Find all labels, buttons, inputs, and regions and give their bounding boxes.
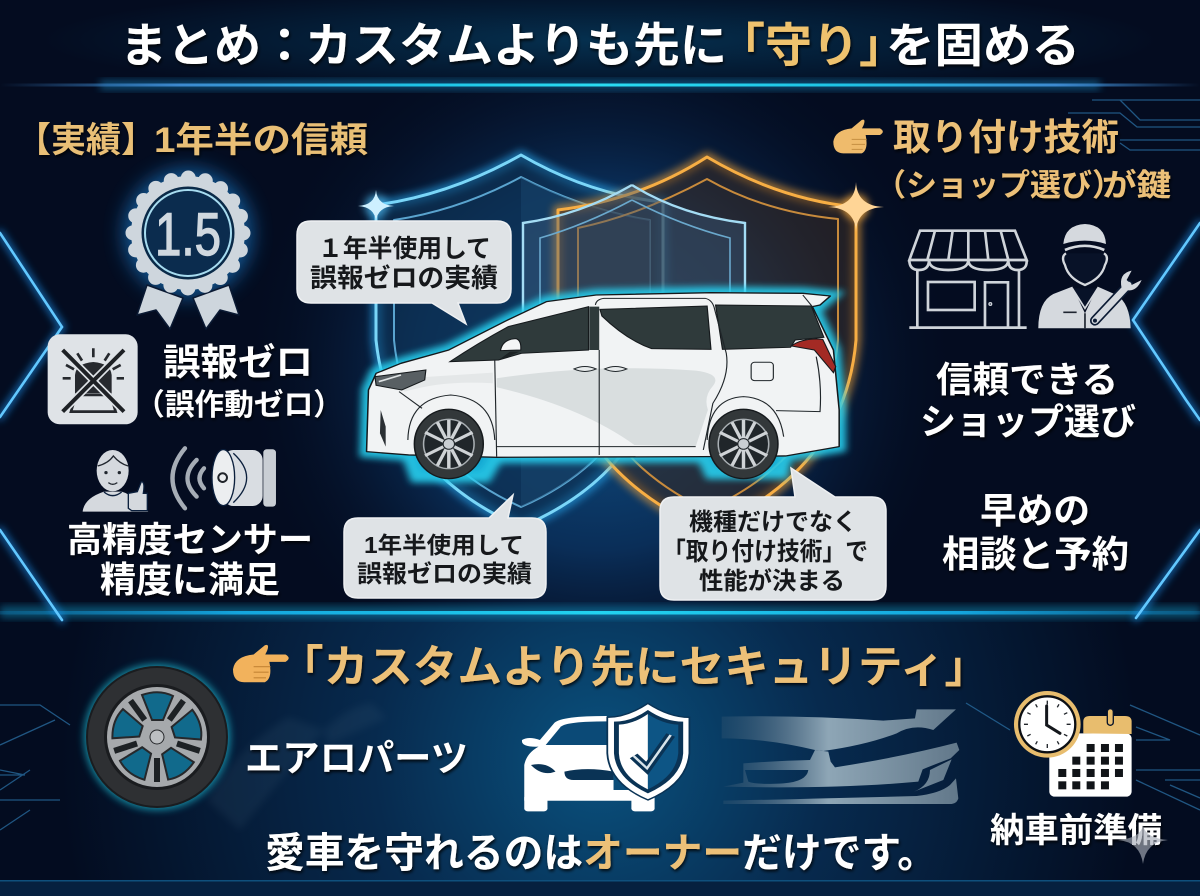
- text: early consultation and booking: 相談と予約: [942, 534, 1129, 575]
- icon: alarm crossed out: [48, 334, 138, 424]
- text: high precision sensor: 高精度センサー: [67, 521, 313, 560]
- text: choose a trusted shop: [920, 359, 1136, 442]
- icon: middle shield: [523, 185, 745, 420]
- title: カスタムよりも先に: [305, 19, 727, 72]
- icon: light flares on shields: [358, 182, 884, 232]
- icon: tire and wheel: [84, 664, 230, 810]
- text: aero parts: エアロパーツ: [245, 738, 468, 779]
- heading: installation skill: 取り付け技術: [893, 117, 1119, 158]
- icon: pointing hand: [233, 645, 289, 682]
- icon: 1.5 rosette badge: [124, 169, 252, 329]
- wheel: front: [414, 409, 483, 479]
- title: 守り: [765, 19, 859, 72]
- text: only the owner can protect the car: 愛車を守れるのはオーナーだけです。: [265, 830, 937, 876]
- chevron neon lines: [0, 223, 1200, 620]
- text: satisfied with precision: 精度に満足: [100, 559, 280, 600]
- icon: satisfied user: [83, 450, 148, 512]
- heading: track record: 1年半の信頼: [154, 121, 368, 160]
- wheel: rear: [709, 409, 778, 479]
- icon: mechanic with wrench: [1038, 224, 1142, 328]
- text: zero false alarms: 誤報ゼロ: [163, 342, 313, 383]
- icon: clock and calendar: [1014, 691, 1132, 797]
- decorative swoosh: [207, 703, 386, 830]
- callout: bottom right: 性能が決まる: [699, 567, 845, 595]
- icon: high precision sensor: [172, 448, 276, 508]
- heading: shop selection is key: が鍵: [1102, 168, 1171, 203]
- panel: center shields and car: [297, 155, 886, 600]
- heading: track record: 【実績】: [16, 121, 156, 160]
- icon: orange shield: [558, 157, 856, 530]
- callout: bottom left: 誤報ゼロの実績: [357, 560, 532, 588]
- panel: installation skill (right column): [833, 117, 1171, 575]
- icon: 1.5 rosette badge: 1.5: [155, 201, 221, 268]
- text: choose a trusted shop: ショップ選び: [920, 401, 1136, 442]
- text: pre-delivery preparation: 納車前準備: [990, 812, 1162, 850]
- callout: bottom left: 1年半使用して: [364, 532, 524, 558]
- text: early consultation and booking: 早めの: [980, 490, 1090, 531]
- title: を固める: [886, 19, 1080, 72]
- heading: security before custom: 「カスタムより先にセキュリティ」: [279, 643, 989, 692]
- text: choose a trusted shop: 信頼できる: [936, 359, 1118, 400]
- icon: blue shield: [376, 155, 663, 527]
- callout: bottom right: 「取り付け技術」で: [663, 538, 868, 566]
- illustration: aero body kit silhouette: [722, 709, 959, 804]
- callout: top left: 誤報ゼロの実績: [310, 263, 498, 293]
- callout: top left: １年半使用して: [318, 235, 491, 263]
- panel: track record (left column): [16, 121, 368, 600]
- callout: bottom left: [344, 495, 546, 598]
- text: zero malfunctions: （誤作動ゼロ）: [135, 389, 343, 422]
- title: 」: [859, 19, 906, 72]
- callout: top left: [297, 221, 511, 324]
- text: early consultation and booking: [942, 490, 1129, 575]
- title: [120, 19, 1080, 72]
- icon: car with shield check: [522, 703, 689, 811]
- heading: shop selection is key: （ショップ選び）: [875, 168, 1123, 203]
- illustration: white minivan: [367, 293, 839, 479]
- title: まとめ：: [120, 19, 308, 72]
- decorative sparkle: [1118, 825, 1168, 864]
- heading: track record: [16, 121, 368, 160]
- icon: shop: [909, 231, 1027, 328]
- panel: bottom band: [84, 643, 1168, 876]
- callout: bottom right: [660, 468, 886, 600]
- icon: pointing hand: [833, 120, 883, 153]
- callout: bottom right: 機種だけでなく: [689, 509, 857, 536]
- title: 「: [718, 19, 765, 72]
